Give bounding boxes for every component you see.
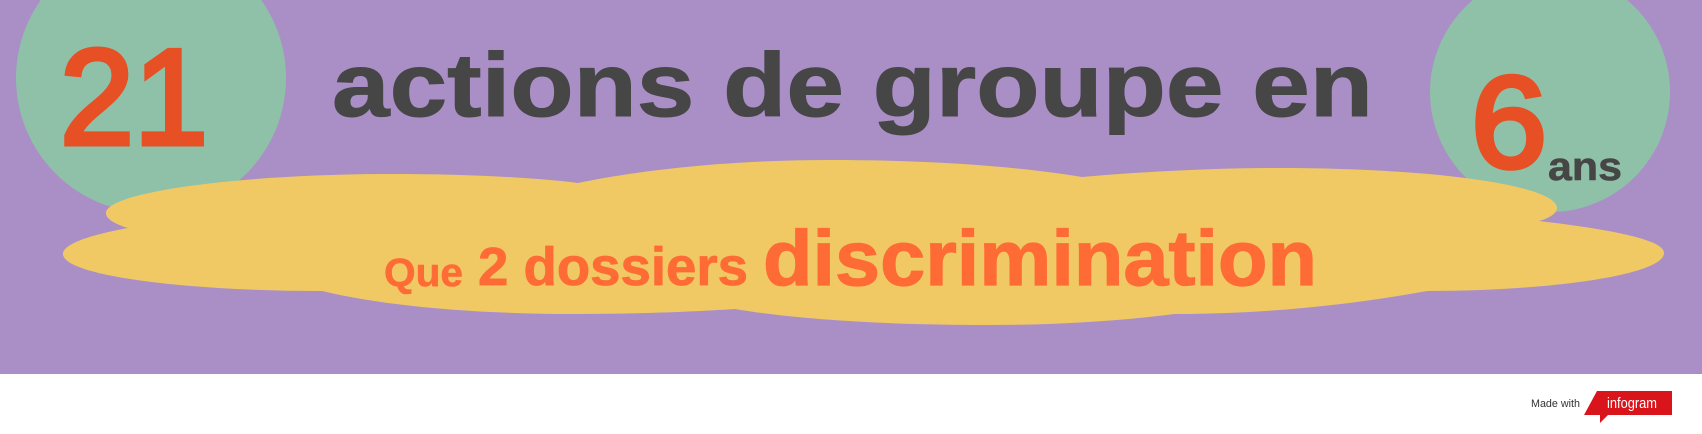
circle: left green — [16, 0, 286, 213]
text: Que: Que — [384, 251, 463, 295]
circle: right green — [1430, 0, 1670, 212]
text: discrimination: discrimination — [763, 214, 1317, 302]
logo flag — [1584, 391, 1672, 423]
number: 6: 6 — [1471, 49, 1547, 195]
text: 2 dossiers: 2 dossiers — [478, 237, 748, 297]
number: 21: 21 — [60, 21, 208, 173]
logo text: infogram: infogram — [1607, 395, 1657, 412]
heading: actions de groupe en: actions de groupe en — [332, 36, 1373, 136]
footer credit: Made with infogram — [1531, 391, 1672, 423]
label: ans: ans — [1548, 145, 1622, 189]
yellow cloud shape — [63, 160, 1664, 325]
text: Made with: Made with — [1531, 398, 1580, 410]
